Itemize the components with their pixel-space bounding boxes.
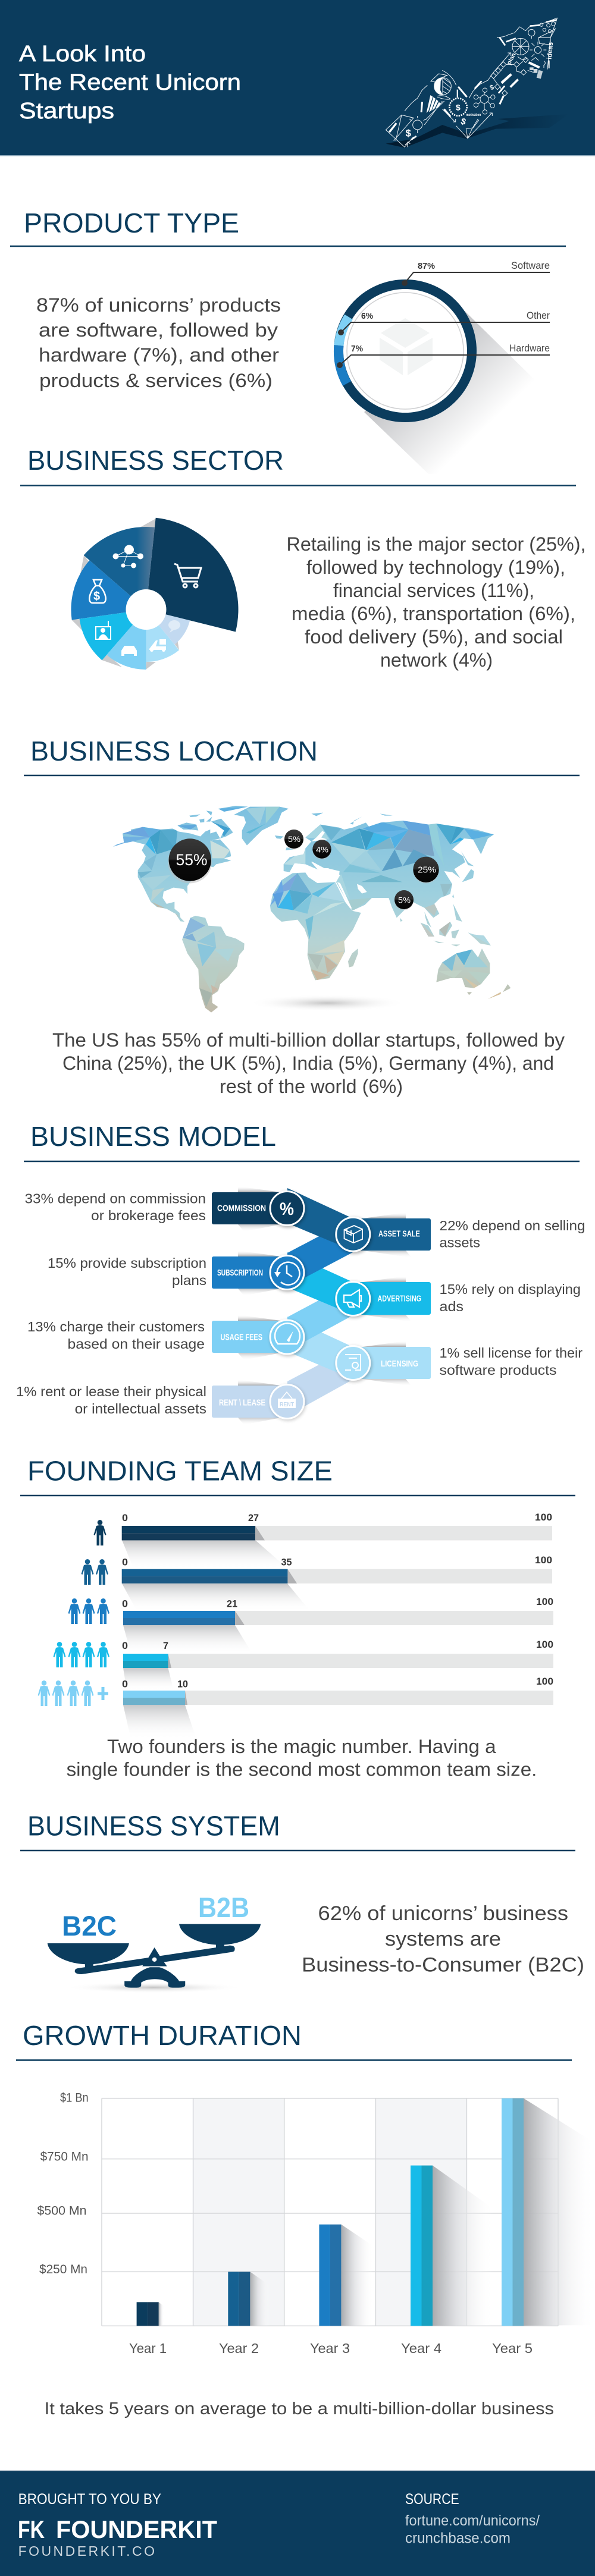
bar: two founders 35 (122, 1554, 552, 1584)
text: usage fees note: 13% charge their customers (27, 1319, 205, 1334)
text: licensing note: software products (439, 1362, 557, 1378)
heading: growth duration: GROWTH DURATION (23, 2020, 302, 2051)
icon: four people (54, 1642, 109, 1667)
icon: growth arrow sketch: ideas (546, 42, 555, 59)
text: sector description (287, 533, 585, 671)
bar: more than four founders 10: 100 (536, 1676, 553, 1687)
panel: founding team size (20, 1456, 575, 1780)
text: y axis labels: $500 Mn (37, 2204, 87, 2218)
bar: two founders 35: 35 (281, 1557, 292, 1568)
text: usage fees note: based on their usage (68, 1336, 205, 1352)
text: source links (405, 2512, 540, 2547)
bar: two founders 35: 100 (535, 1554, 552, 1566)
bar: one founder 27: 100 (535, 1512, 552, 1523)
callout: software 87%: Software (511, 260, 550, 271)
title: Startups (19, 99, 114, 124)
panel: footer (0, 2470, 595, 2576)
bar: two founders 35: 0 (122, 1557, 128, 1568)
text: y axis labels: $1 Bn (60, 2091, 89, 2105)
text: commission note (25, 1191, 206, 1223)
callout: India 5%: 5% (398, 896, 411, 905)
bar: three founders 21: 21 (227, 1598, 237, 1610)
text: usage fees note (27, 1319, 205, 1352)
icon: box watermark (380, 318, 433, 375)
item: commission: % (280, 1199, 294, 1219)
text: asset sale note: 22% depend on selling (439, 1218, 585, 1233)
text: advertising note (439, 1281, 581, 1314)
text: source links: fortune.com/unicorns/ (405, 2512, 540, 2529)
text: B2B label: B2B (198, 1892, 249, 1923)
text: website: FOUNDERKIT.CO (18, 2543, 155, 2559)
bar: more than four founders 10: 0 (122, 1678, 128, 1690)
item: usage fees: USAGE FEES (220, 1333, 262, 1343)
bar: year 2 (228, 2272, 250, 2326)
item: asset sale: ASSET SALE (378, 1230, 420, 1239)
text: source links: crunchbase.com (405, 2530, 511, 2547)
item: rent or lease: RENT \ LEASE (219, 1399, 265, 1408)
callout: software 87% (402, 260, 550, 286)
text: sector description: followed by technology (19%), (306, 557, 565, 578)
text: product type description: products & services (6%) (39, 370, 273, 391)
item: licensing (336, 1346, 431, 1382)
bar: four founders 7: 0 (122, 1640, 128, 1651)
panel: business model (16, 1121, 585, 1425)
bar: year 4 (411, 2166, 433, 2326)
callout: Germany 4% (312, 840, 331, 859)
panel: growth duration (16, 2020, 595, 2418)
text: x axis labels: Year 5 (492, 2341, 533, 2356)
text: location description (52, 1029, 565, 1097)
text: x axis labels: Year 1 (129, 2341, 167, 2356)
text: B2C label: B2C (62, 1910, 117, 1942)
text: team size description (67, 1736, 537, 1780)
text: subscription note (48, 1255, 206, 1288)
text: commission note: 33% depend on commission (25, 1191, 206, 1207)
chart: growth bars (37, 2091, 595, 2356)
item: commission: COMMISSION (217, 1204, 266, 1213)
text: source heading: SOURCE (405, 2491, 459, 2508)
text: product type description: are software, followed by (39, 319, 278, 341)
text: rent note: 1% rent or lease their physical (16, 1384, 206, 1399)
bar: four founders 7: 7 (163, 1640, 168, 1651)
text: asset sale note (439, 1218, 585, 1250)
bar: three founders 21 (122, 1596, 553, 1625)
panel: product type (10, 208, 566, 476)
bar: more than four founders 10 (122, 1676, 553, 1705)
icon: chat bubble (168, 620, 180, 633)
text: licensing note: 1% sell license for their (439, 1345, 583, 1361)
callout: China 25%: 25% (418, 865, 436, 875)
icon: shopping cart (174, 564, 201, 588)
title (19, 42, 241, 124)
chart: product type donut (337, 260, 550, 476)
icon: network (113, 545, 143, 568)
icon: growth arrow sketch: motivation (466, 113, 481, 117)
bar: year 1 (137, 2302, 159, 2326)
callout: US 55%: 55% (176, 851, 207, 869)
title: The Recent Unicorn (19, 70, 241, 95)
callout: China 25% (413, 857, 439, 884)
bar: year 5 (502, 2099, 524, 2326)
text: product type description: hardware (7%), and other (39, 344, 279, 366)
text: brought to you by: BROUGHT TO YOU BY (18, 2491, 161, 2508)
heading: business sector: BUSINESS SECTOR (27, 445, 284, 476)
text: commission note: or brokerage fees (91, 1208, 206, 1223)
callout: hardware 7%: 7% (351, 344, 363, 354)
panel: business location (24, 736, 580, 1097)
chart: sector pie (71, 518, 239, 670)
bar: one founder 27: 27 (248, 1512, 259, 1523)
text: asset sale note: assets (439, 1234, 480, 1250)
item: subscription (212, 1256, 306, 1292)
item: licensing: LICENSING (381, 1359, 418, 1369)
callout: other 6%: 6% (361, 311, 373, 321)
callout: hardware 7% (337, 343, 550, 368)
icon: one person (94, 1520, 106, 1545)
bar: year 3 (319, 2225, 341, 2326)
text: location description: The US has 55% of multi-billion dollar startups, followed by (52, 1029, 565, 1051)
text: rent note: or intellectual assets (75, 1401, 206, 1416)
text: advertising note: ads (439, 1299, 464, 1314)
text: sector description: food delivery (5%), and social (305, 626, 563, 648)
logo: founderkit: FK (18, 2515, 45, 2543)
bar: three founders 21: 0 (122, 1598, 128, 1610)
text: subscription note: 15% provide subscription (48, 1255, 206, 1271)
text: licensing note (439, 1345, 583, 1378)
text: y axis labels: $750 Mn (40, 2150, 89, 2163)
icon: money bag (89, 580, 106, 603)
item: advertising (336, 1282, 431, 1318)
title: A Look Into (19, 42, 146, 67)
item: rent or lease: RENT (280, 1402, 294, 1408)
callout: India 5% (394, 890, 414, 910)
callout: US 55% (168, 838, 212, 884)
icon: balance scale (48, 1892, 261, 1993)
heading: business system: BUSINESS SYSTEM (27, 1811, 280, 1842)
text: y axis labels (37, 2091, 89, 2276)
icon: growth arrow sketch: $ (456, 102, 461, 112)
item: advertising: ADVERTISING (377, 1295, 421, 1304)
bar: one founder 27 (122, 1512, 552, 1540)
icon: growth arrow sketch: plan (506, 52, 518, 66)
diagram: business model ribbon (212, 1186, 431, 1425)
icon: car (121, 646, 137, 656)
panel: business system (20, 1811, 584, 1993)
icon: growth arrow sketch: $ (406, 127, 412, 139)
text: y axis labels: $250 Mn (39, 2263, 87, 2276)
text: location description: rest of the world (6%) (220, 1076, 403, 1097)
text: team size description: Two founders is the magic number. Having a (107, 1736, 496, 1757)
item: commission (212, 1192, 306, 1227)
bar: four founders 7: 100 (536, 1639, 553, 1650)
text: product type description (36, 294, 281, 391)
bar: three founders 21: 100 (536, 1596, 553, 1607)
text: sector description: media (6%), transportation (6%), (292, 603, 575, 624)
icon: delivery scooter (149, 639, 166, 652)
text: x axis labels: Year 4 (401, 2341, 441, 2356)
chart: world map (113, 806, 511, 1013)
item: asset sale (336, 1217, 431, 1254)
icon: two people (81, 1559, 108, 1585)
item: subscription: SUBSCRIPTION (217, 1268, 263, 1278)
text: sector description: Retailing is the major sector (25%), (287, 533, 585, 555)
text: advertising note: 15% rely on displaying (439, 1281, 581, 1297)
callout: software 87%: 87% (418, 261, 435, 271)
logo: founderkit: FOUNDERKIT (56, 2515, 217, 2543)
icon: growth arrow sketch (386, 18, 569, 147)
icon: four people plus (38, 1680, 108, 1706)
heading: business model: BUSINESS MODEL (30, 1121, 276, 1152)
item: rent or lease (212, 1384, 306, 1421)
text: location description: China (25%), the UK (5%), India (5%), Germany (4%), and (62, 1053, 554, 1074)
icon: three people (68, 1598, 109, 1624)
callout: other 6%: Other (527, 310, 550, 321)
icon: growth arrow sketch: $ (489, 84, 496, 92)
text: growth description: It takes 5 years on average to be a multi-billion-dollar business (45, 2399, 554, 2418)
callout: UK 5% (284, 830, 303, 849)
chart: team size bars (38, 1512, 553, 1739)
text: business system description: 62% of unicorns’ business (318, 1902, 568, 1925)
panel: header banner (0, 0, 595, 156)
text: rent note (16, 1384, 206, 1416)
text: team size description: single founder is the second most common team size. (67, 1759, 537, 1780)
icon: growth arrow sketch: $ (460, 117, 467, 127)
text: product type description: 87% of unicorns’ products (36, 294, 281, 316)
panel: business sector (20, 445, 585, 671)
heading: founding team size: FOUNDING TEAM SIZE (27, 1456, 333, 1487)
callout: hardware 7%: Hardware (509, 343, 550, 354)
bar: more than four founders 10: 10 (177, 1678, 188, 1690)
text: x axis labels (129, 2341, 533, 2356)
text: sector description: network (4%) (380, 649, 493, 671)
text: x axis labels: Year 3 (310, 2341, 350, 2356)
callout: other 6% (338, 310, 550, 335)
item: usage fees (212, 1320, 306, 1356)
text: sector description: financial services (11%), (333, 580, 534, 601)
text: x axis labels: Year 2 (219, 2341, 259, 2356)
icon: media presenter (96, 621, 111, 639)
text: business system description (302, 1902, 584, 1977)
icon: money bag: $ (93, 590, 100, 603)
callout: Germany 4%: 4% (316, 844, 328, 854)
heading: business location: BUSINESS LOCATION (30, 736, 318, 766)
heading: product type: PRODUCT TYPE (24, 208, 239, 238)
bar: four founders 7 (122, 1639, 553, 1668)
text: subscription note: plans (172, 1273, 206, 1288)
text: business system description: Business-to-Consumer (B2C) (302, 1954, 584, 1977)
text: business system description: systems are (385, 1928, 501, 1950)
bar: one founder 27: 0 (122, 1512, 128, 1523)
callout: UK 5%: 5% (288, 834, 300, 844)
